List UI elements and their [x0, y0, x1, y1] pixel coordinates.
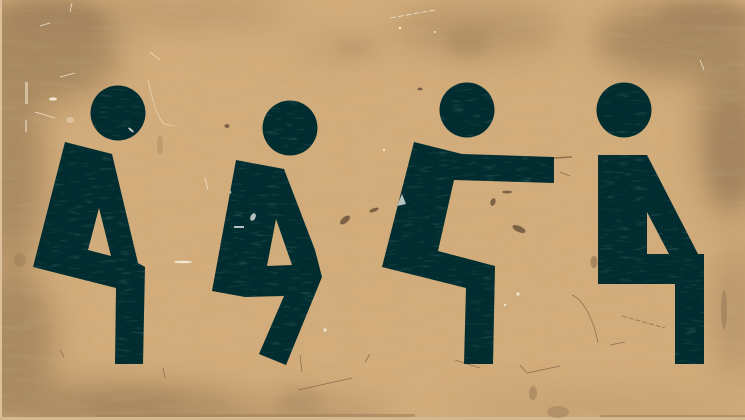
figure 3 reaching forward	[382, 82, 554, 364]
body 3	[382, 142, 554, 364]
figure 4	[596, 82, 704, 364]
body 2	[212, 160, 322, 365]
worn ink texture on figures	[33, 84, 704, 364]
worn strips at the edges	[0, 0, 2, 420]
figure 1	[33, 86, 146, 364]
body 4	[598, 155, 704, 364]
head 1	[90, 86, 146, 140]
body 1	[33, 142, 145, 364]
head 2	[262, 100, 318, 156]
figure 2	[212, 100, 322, 365]
head 4	[596, 82, 652, 138]
head 3	[440, 82, 494, 138]
